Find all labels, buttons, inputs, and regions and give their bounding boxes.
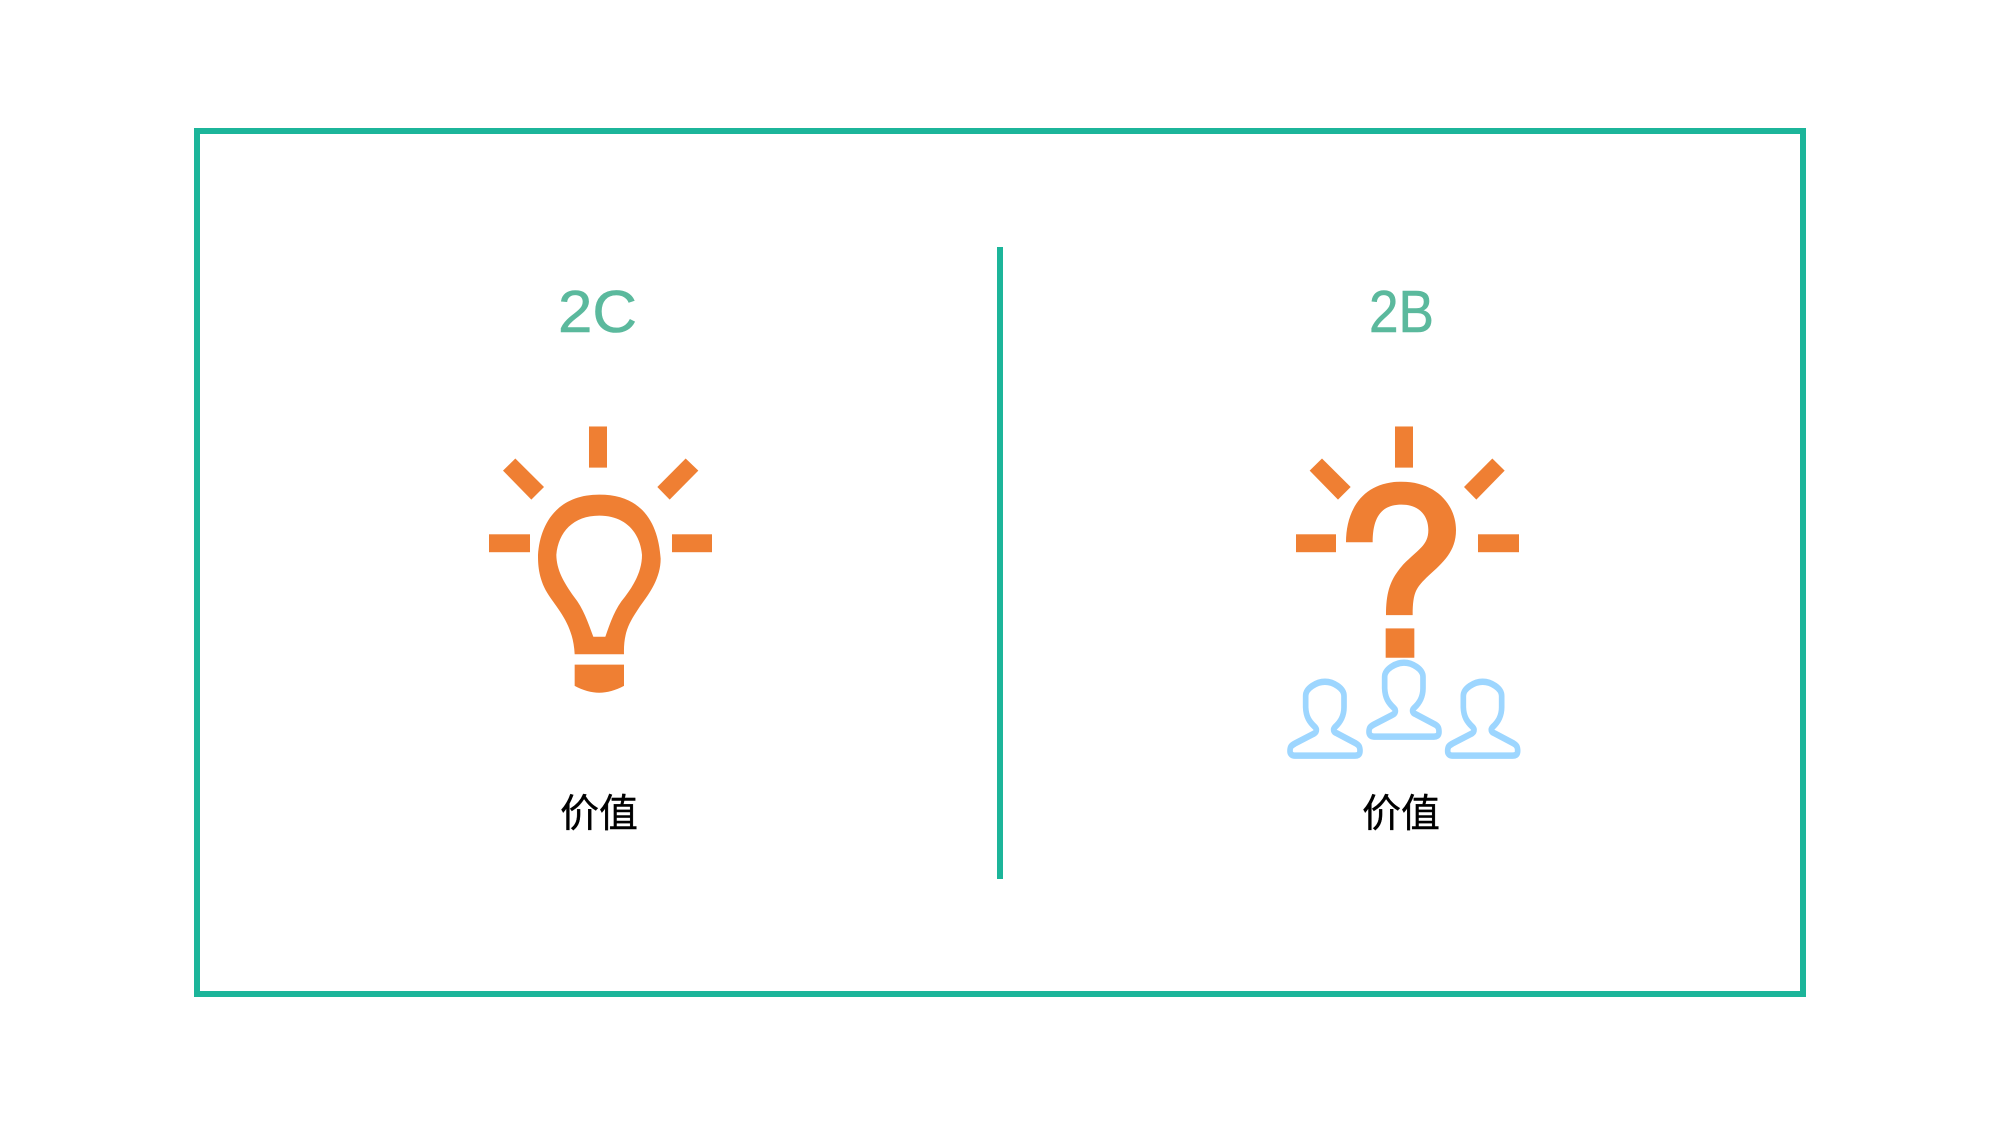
caption: value (2C): 价值 [560, 793, 638, 836]
caption: value (2B): 价值 [1362, 793, 1440, 836]
heading: 2B: 2B [1369, 279, 1434, 345]
heading: 2C: 2C [558, 279, 637, 345]
panel: 2C [489, 279, 712, 836]
vertical divider between panels [997, 247, 1003, 879]
panel: 2B [1290, 279, 1519, 756]
icon: orange question mark with rays [1296, 426, 1519, 658]
panel: outer green frame [197, 131, 1803, 994]
icon: three blue user outlines [1290, 663, 1518, 756]
icon: orange light bulb with rays [489, 426, 712, 693]
